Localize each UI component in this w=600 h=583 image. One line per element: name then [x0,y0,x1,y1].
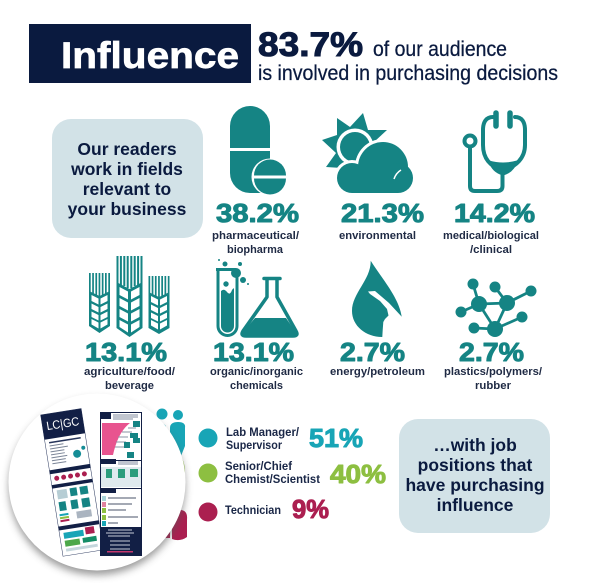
stat: agriculture: beverage [105,380,154,392]
stat: agriculture: 13.1% [85,337,167,367]
right report page [100,412,142,556]
icon: capsule and tablet [230,106,288,196]
stat: medical [443,198,539,256]
icon: oil drop with head profile [352,261,406,342]
headline statistic: 83.7% [258,26,363,64]
stat: plastics: 2.7% [459,337,524,367]
panel: job positions: have purchasing [405,475,545,495]
left report page [41,409,104,556]
panel: our readers: your business [68,199,187,219]
legend: senior chemist [198,459,386,489]
stat: medical: medical/biological [443,230,539,242]
panel: our readers: relevant to [83,179,171,199]
legend: lab manager: Lab Manager/ [226,425,300,439]
legend: technician [198,494,329,524]
stat: energy: energy/petroleum [330,366,425,378]
stat: organic chemicals: chemicals [230,380,283,392]
stat: pharmaceutical [212,198,299,256]
headline statistic [258,26,558,85]
panel: our readers: work in fields [70,159,183,179]
legend: senior chemist: Chemist/Scientist [225,472,320,486]
panel: job positions [399,419,550,533]
stat: pharmaceutical: biopharma [227,244,284,256]
icon: test tube and flask [216,259,297,336]
legend: lab manager: 51% [309,423,363,453]
legend: technician: 9% [292,494,329,524]
icon: molecule [456,278,536,337]
title: Influence [61,35,239,76]
stat: energy: 2.7% [340,337,405,367]
stat: plastics: rubber [475,380,512,392]
stat: organic chemicals: organic/inorganic [210,366,303,378]
legend: technician: Technician [225,503,281,517]
icon: people behind the circle [150,408,187,540]
stat: agriculture [84,337,175,392]
stat: medical: /clinical [470,244,512,256]
panel: our readers: Our readers [77,139,177,159]
icon: wheat [89,256,170,337]
stat: organic chemicals [210,337,303,392]
icon: sun and cloud [322,113,413,196]
panel: job positions: influence [437,495,514,515]
stat: organic chemicals: 13.1% [213,337,294,367]
stat: environmental: environmental [339,230,416,242]
left report page: LC|GC [45,414,80,433]
legend: senior chemist: 40% [330,459,386,489]
headline statistic: is involved in purchasing decisions [258,62,558,85]
panel: job positions: …with job [433,435,517,455]
headline statistic: of our audience [373,38,507,61]
stat: plastics: plastics/polymers/ [444,366,542,378]
stat: medical: 14.2% [454,198,535,228]
stat: energy [330,337,425,378]
stat: environmental: 21.3% [341,198,424,228]
stat: agriculture: agriculture/food/ [84,366,175,378]
stat: plastics [444,337,542,392]
magnified report circle [8,394,186,575]
panel: job positions: positions that [418,455,533,475]
icon: stethoscope [464,113,525,191]
legend: lab manager [198,423,363,453]
panel: our readers [52,119,203,238]
stat: pharmaceutical: 38.2% [216,198,299,228]
stat: environmental [339,198,424,242]
legend: lab manager: Supervisor [226,438,282,452]
title [29,24,251,83]
stat: pharmaceutical: pharmaceutical/ [212,230,299,242]
legend: senior chemist: Senior/Chief [225,459,292,473]
